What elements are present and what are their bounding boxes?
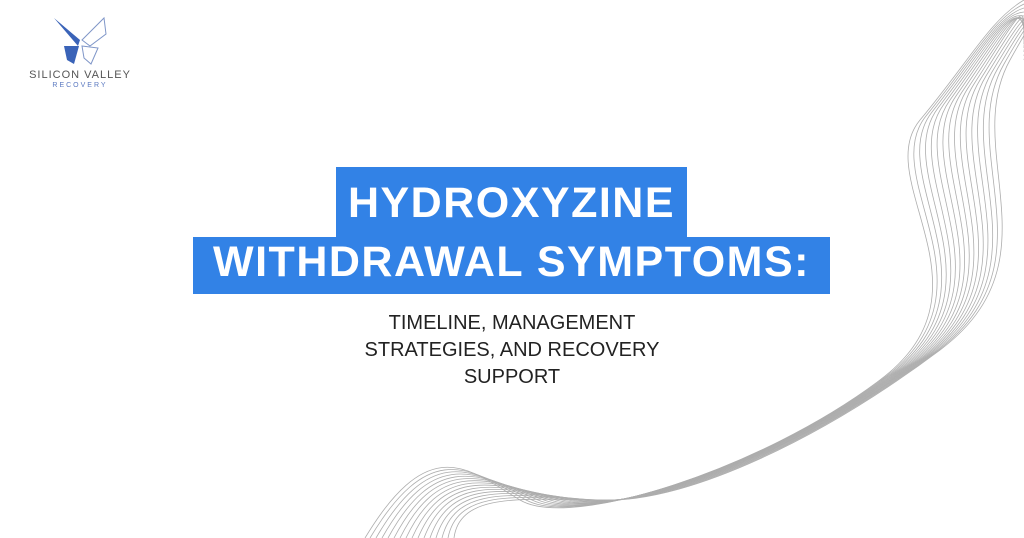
title line 1: [336, 167, 687, 239]
subtitle: STRATEGIES, AND RECOVERY: [365, 339, 659, 361]
logo: RECOVERY: [52, 82, 108, 89]
subtitle: SUPPORT: [464, 366, 560, 388]
logo: [29, 17, 131, 89]
title line 1: HYDROXYZINE: [348, 179, 675, 227]
subtitle: TIMELINE, MANAGEMENT: [389, 312, 635, 334]
subtitle: [365, 312, 659, 388]
icon: butterfly: [54, 17, 106, 65]
logo text: SILICON VALLEY: [29, 69, 131, 81]
title line 2: WITHDRAWAL SYMPTOMS:: [213, 238, 810, 286]
